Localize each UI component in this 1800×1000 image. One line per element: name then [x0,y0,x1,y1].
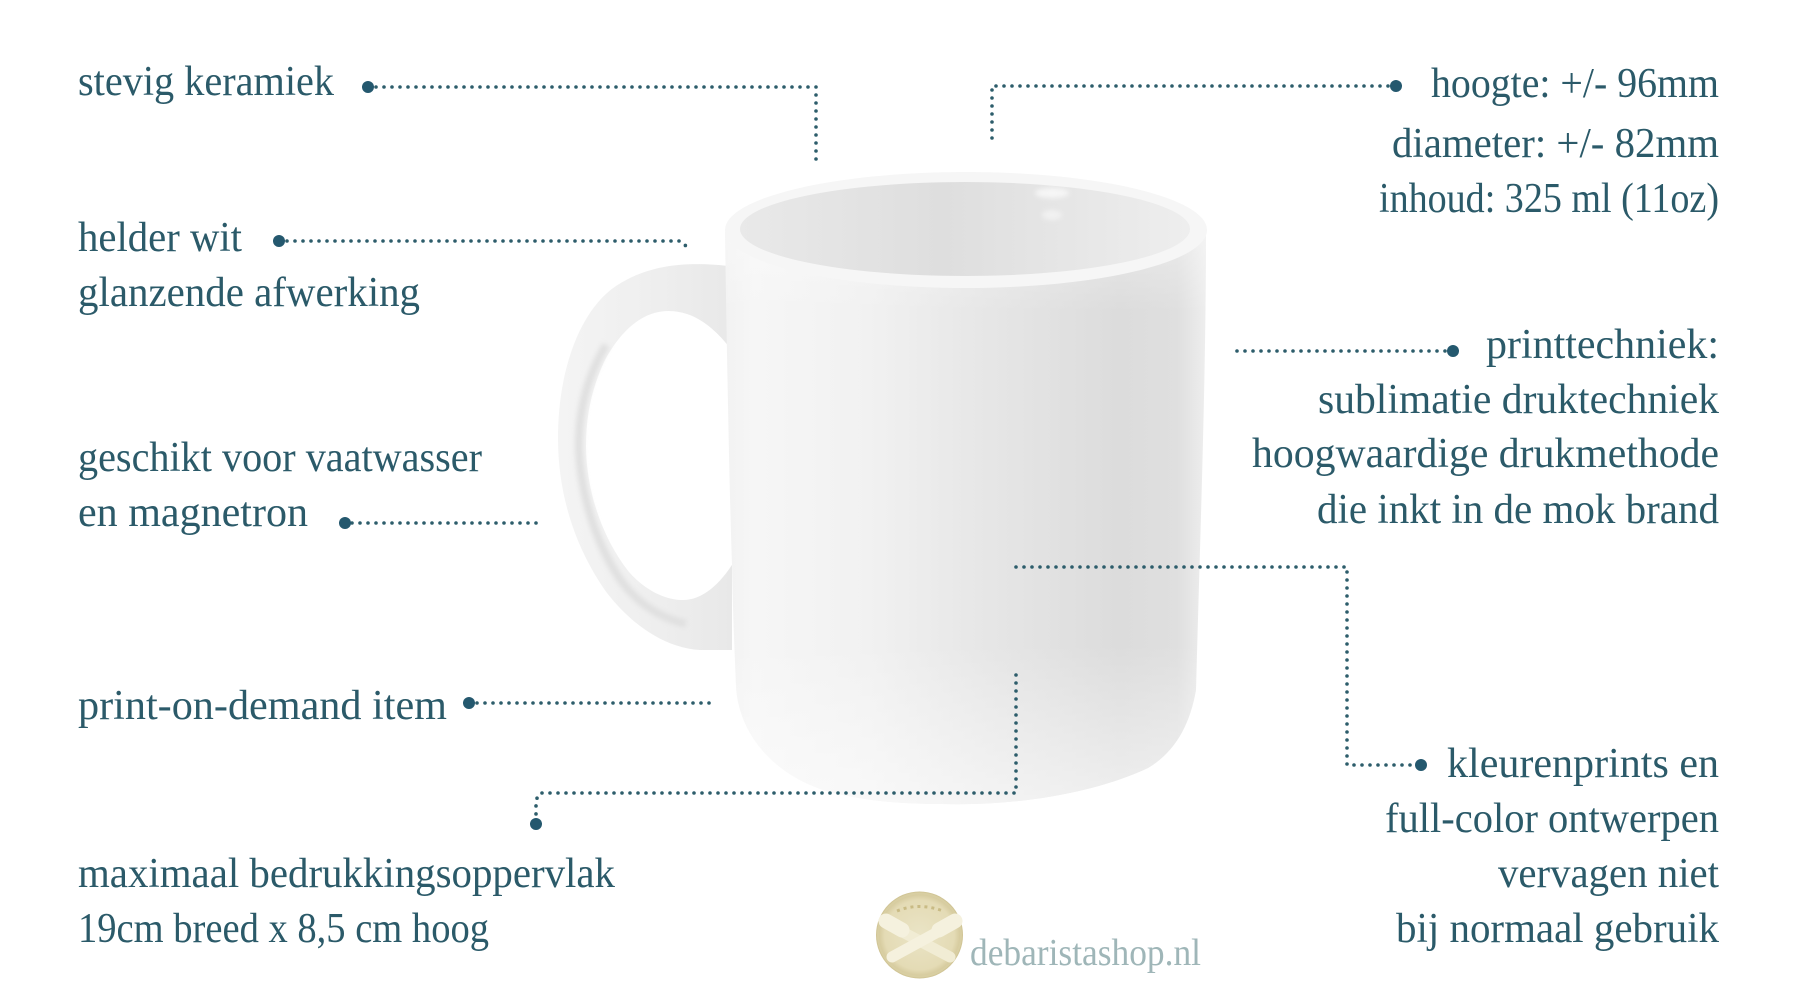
body highlight fade [725,232,1206,804]
callout: afmetingen: diameter: +/- 82mm [1392,121,1719,167]
callout: bedrukkingsoppervlak [78,675,1016,952]
callout: printtechniek [1229,322,1719,533]
callout: vaatwasser en magnetron: en magnetron [78,490,308,536]
handle inner shading [579,345,686,624]
callout: afmetingen: hoogte: +/- 96mm [1431,61,1719,107]
logo: debaristashop [876,892,1201,978]
callout: printtechniek: sublimatie druktechniek [1318,377,1719,423]
callout: vaatwasser en magnetron [78,435,541,536]
callout: kleurenprints: full-color ontwerpen [1385,796,1719,842]
callout: printtechniek: hoogwaardige drukmethode [1252,431,1719,477]
mug interior [740,182,1190,276]
icon: coin with crossed tampers [876,892,963,978]
callout: kleurenprints [1016,567,1719,952]
callout: helder wit [78,215,686,316]
mug rim [725,172,1207,288]
callout: print-on-demand [78,683,714,729]
callout: helder wit: glanzende afwerking [78,270,420,316]
mug body [725,232,1206,804]
callout: stevig keramiek [78,59,816,167]
callout: vaatwasser en magnetron: geschikt voor vaatwasser [78,435,482,481]
callout: afmetingen: inhoud: 325 ml (11oz) [1379,176,1719,222]
mug illustration [558,172,1207,804]
callout: printtechniek: die inkt in de mok brand [1317,487,1719,533]
callout: printtechniek: printtechniek: [1486,322,1719,368]
callout: helder wit: helder wit [78,215,242,261]
callout: kleurenprints: kleurenprints en [1447,741,1719,787]
callout: stevig keramiek: stevig keramiek [78,59,334,105]
interior glare [1035,188,1069,220]
callout: afmetingen [992,61,1719,222]
callout: kleurenprints: bij normaal gebruik [1396,906,1719,952]
brand name: debaristashop.nl [970,932,1201,974]
callout: kleurenprints: vervagen niet [1498,851,1719,897]
callout: bedrukkingsoppervlak: 19cm breed x 8,5 cm hoog [78,906,489,952]
callout: bedrukkingsoppervlak: maximaal bedrukkingsoppervlak [78,851,615,897]
callout: print-on-demand: print-on-demand item [78,683,447,729]
mug handle [558,264,735,650]
